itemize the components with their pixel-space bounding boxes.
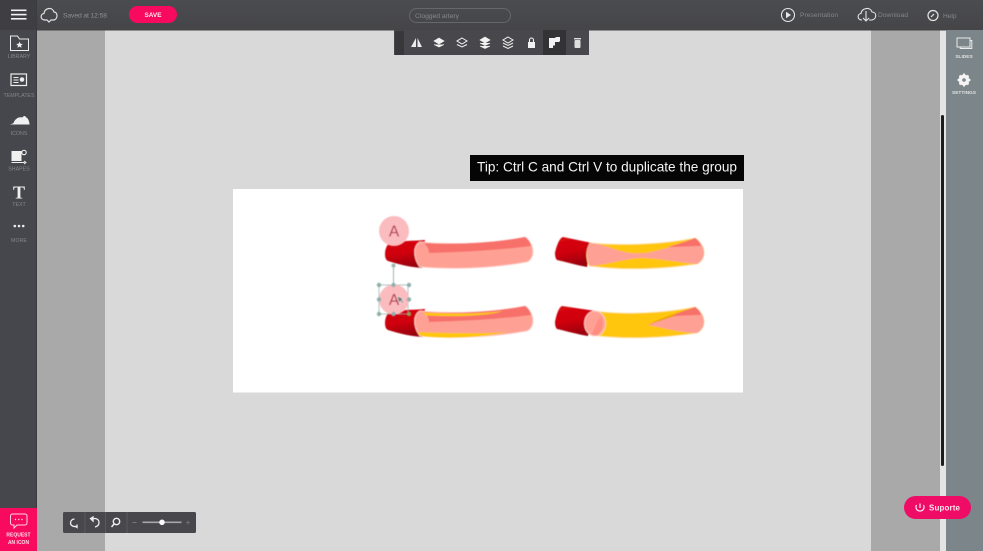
slides tool: SLIDES [955,54,973,60]
slide canvas [233,189,743,392]
templates tool: TEMPLATES [4,93,35,99]
icon: hamburger menu [0,0,37,30]
icon: layer up [434,38,444,47]
object toolbar [394,30,589,55]
icon: cloud saved [41,8,57,22]
support button: Suporte [929,504,961,512]
selected badge: A copy with handles [377,264,411,316]
project name field [410,8,510,22]
artery: narrowed [555,237,704,269]
icon: trash [574,38,581,48]
shapes tool: SHAPES [8,166,30,172]
artery: healthy [385,237,533,268]
text tool: TEXT [12,202,27,208]
shapes tool [8,150,30,172]
templates tool [4,74,35,99]
scrollbar [940,30,946,551]
icon: layer down [457,38,467,47]
badge: A top [379,216,409,246]
zoom slider [132,520,190,525]
request an icon button [0,508,37,551]
tip banner: Tip: Ctrl C and Ctrl V to duplicate the group [477,158,737,174]
project name field: Clogged artery [415,13,460,20]
settings tool [952,74,977,96]
icons tool: ICONS [11,131,28,137]
request an icon button: REQUEST [6,532,31,538]
top bar [0,0,983,30]
zoom toolbar [63,512,196,533]
help button [928,10,957,20]
icon: flip [411,38,422,47]
presentation button: Presentation [800,12,838,19]
settings tool: SETTINGS [952,90,977,96]
right margin band [871,30,940,551]
support button [904,496,971,519]
artery: blocked [555,306,704,338]
artery: slight plaque [385,306,533,338]
left sidebar [0,0,37,508]
library tool: LIBRARY [8,54,31,60]
selected badge: A copy with handles: A [389,292,400,309]
icon: redo [70,519,77,528]
download button: Download [878,12,908,19]
presentation button [782,8,838,22]
help button: Help [943,13,957,20]
icon: group [549,38,560,48]
save button: SAVE [145,12,162,19]
icon: undo [90,517,99,527]
icon: lock [528,38,535,48]
icon: layer to front [480,37,490,48]
tip banner [470,155,744,181]
more tool: MORE [11,238,27,244]
icon: layer to back [503,37,513,48]
badge: A top: A [389,224,400,240]
library tool [8,36,31,60]
save button [129,6,177,23]
icon: magnifier [112,518,120,527]
text tool: T [13,182,25,202]
icons tool [9,116,30,137]
left margin band [37,30,105,551]
text tool [12,182,27,208]
more tool [11,225,27,244]
right sidebar [946,30,983,551]
request an icon button: AN ICON [8,540,29,546]
icon: move cursor [397,296,404,304]
saved status text: Saved at 12:58 [63,12,107,20]
download button [858,8,908,21]
slides tool [955,38,973,60]
